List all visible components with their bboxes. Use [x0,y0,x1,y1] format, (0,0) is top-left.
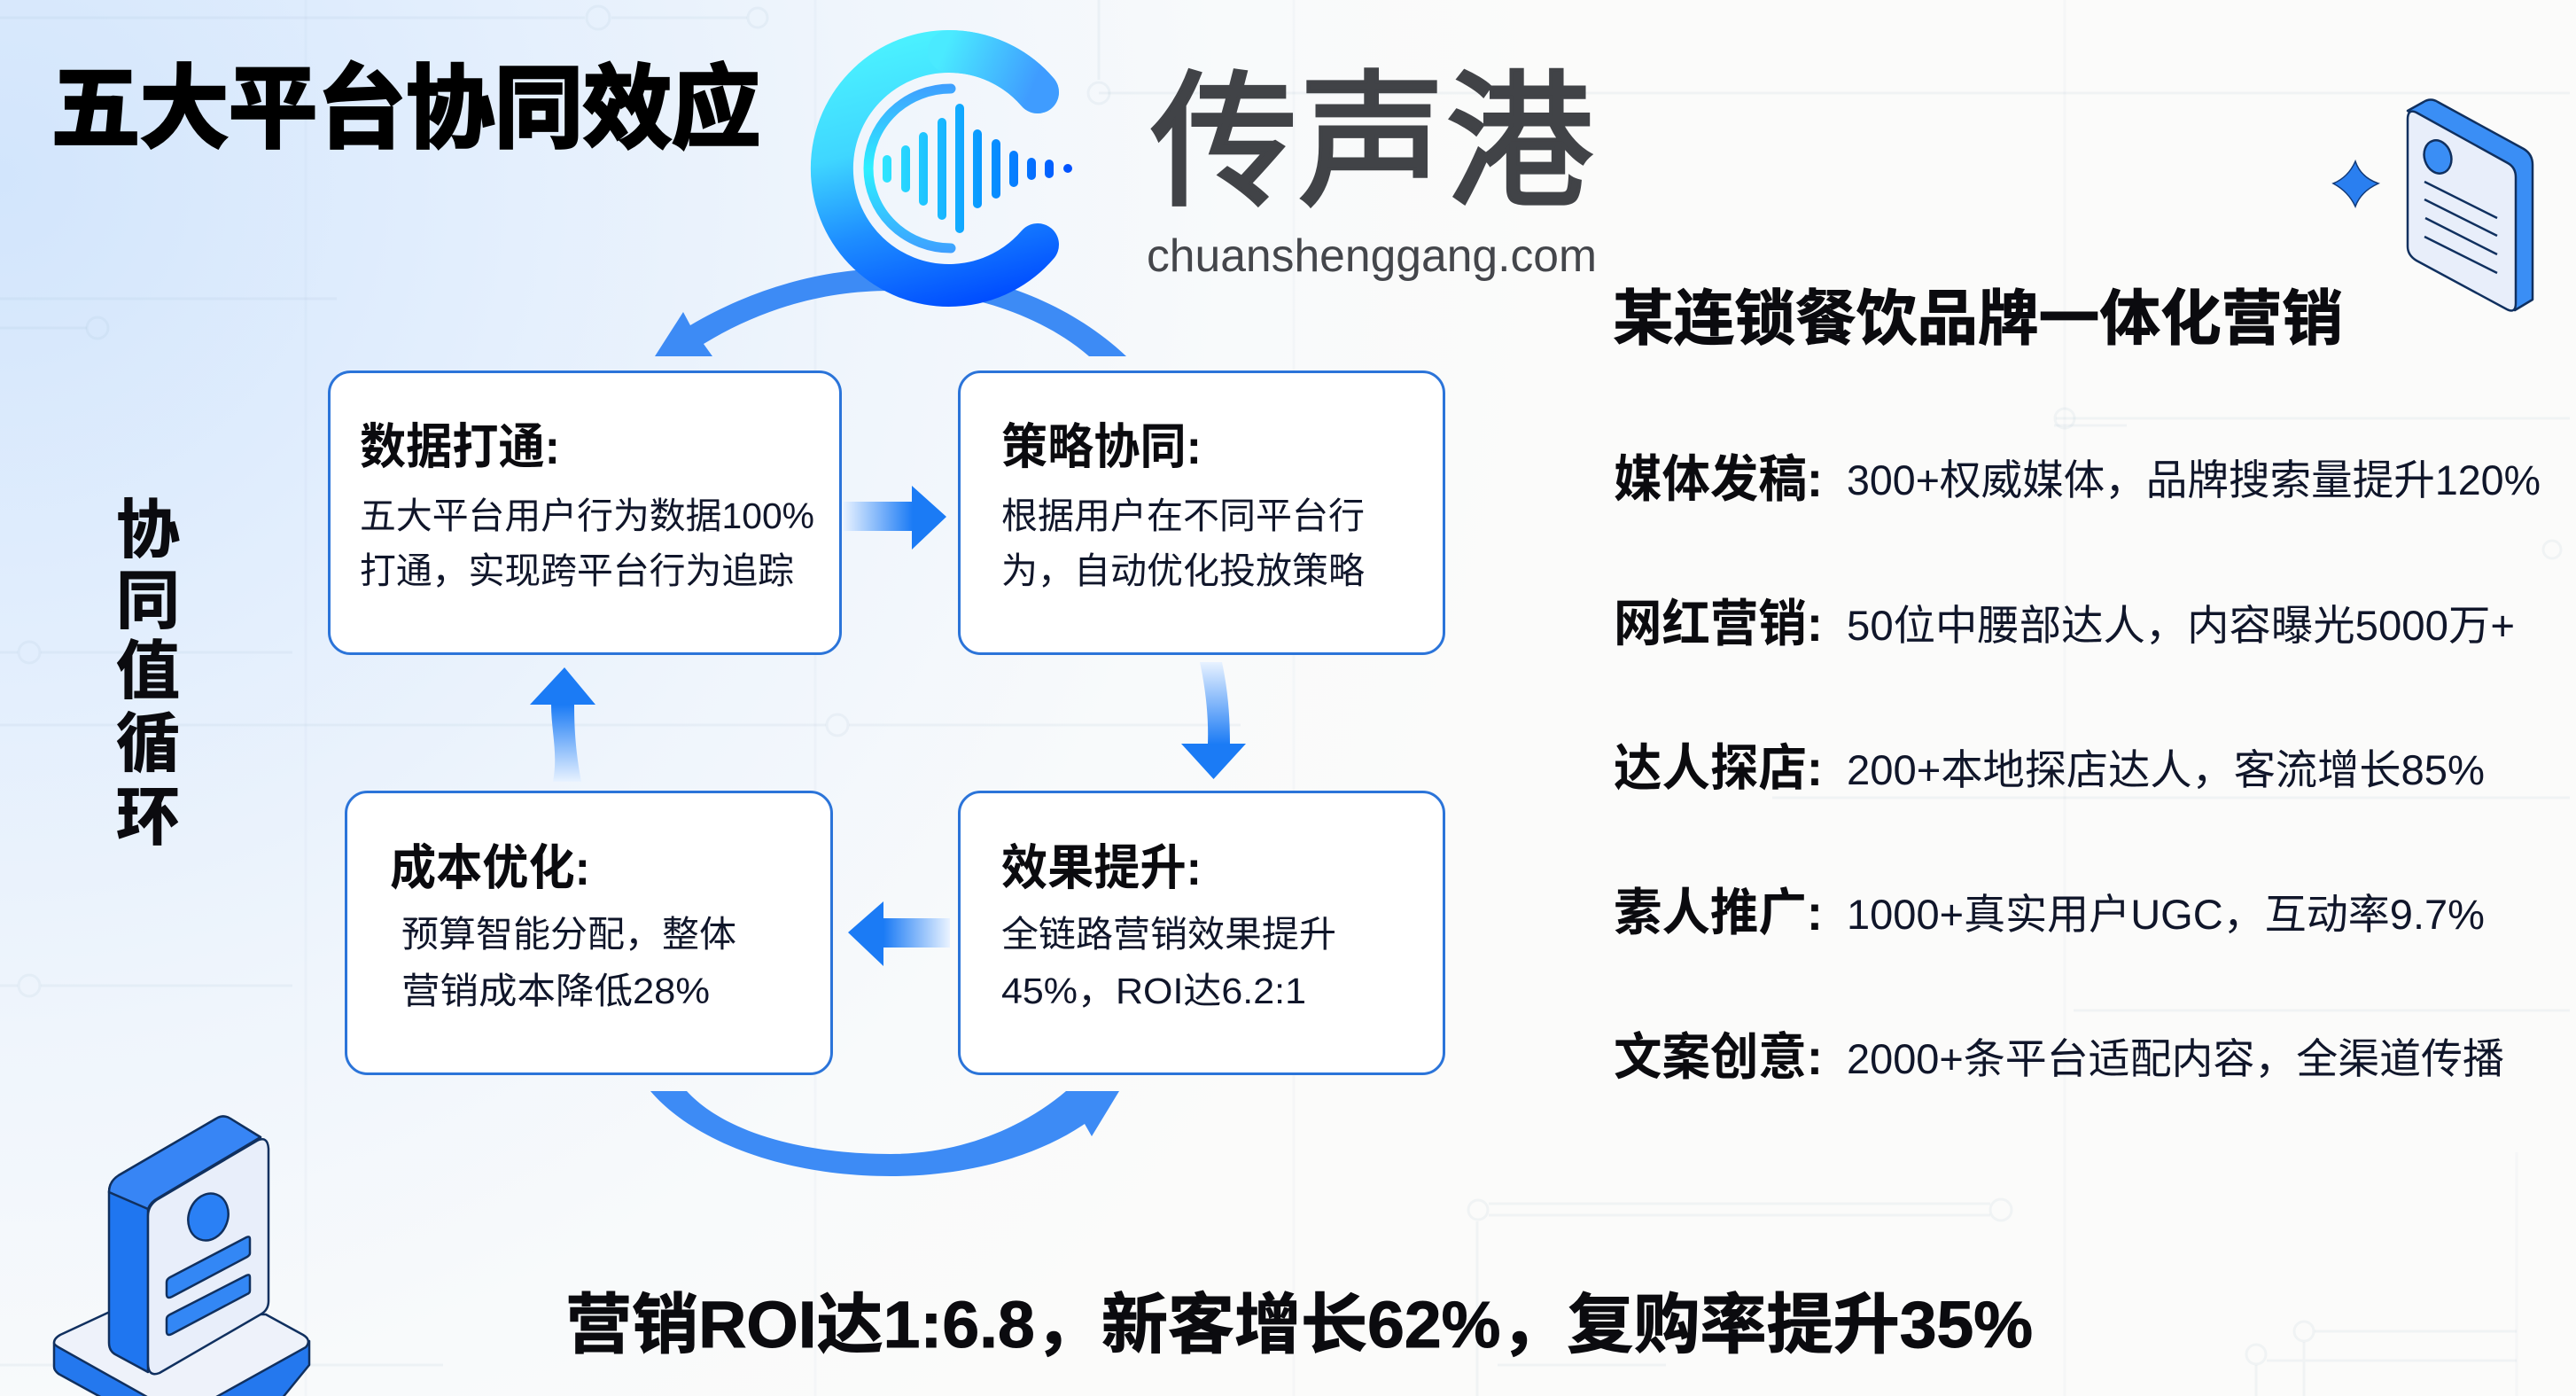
arrow: top curved arrow into data card [655,269,1126,356]
arrow: up [530,667,595,782]
list: media release [1614,451,2541,508]
list: ordinary user promotion: 1000+真实用户UGC，互动率9.7% [1847,891,2485,938]
card heading: 策略协同: [1001,419,1202,474]
card heading: 成本优化: [390,840,590,895]
list: influencer marketing: 网红营销: [1614,596,1823,652]
right panel heading: 某连锁餐饮品牌一体化营销 [1613,285,2343,353]
card heading: 效果提升: [1001,840,1202,895]
panel: data connection card [330,372,840,654]
card body [401,914,736,1011]
list: ordinary user promotion [1614,885,2485,941]
card body [1001,495,1365,591]
vertical label: 同 [116,566,180,637]
arrow: right [844,486,946,550]
logo wordmark: 传声港 [1150,61,1593,225]
list: ordinary user promotion: 素人推广: [1614,885,1823,941]
bottom results line: 营销ROI达1:6.8，新客增长62%，复购率提升35% [565,1288,2033,1361]
vertical label: 值 [116,636,180,707]
list: influencer marketing: 50位中腰部达人，内容曝光5000万+ [1847,602,2515,649]
logo icon [832,51,1072,285]
card body [1001,914,1336,1011]
vertical label: 循 [116,709,180,780]
arrow: down [1181,662,1246,779]
list: store visits: 200+本地探店达人，客流增长85% [1847,746,2485,793]
card body: 45%，ROI达6.2:1 [1001,971,1306,1011]
list: copy creative [1614,1029,2504,1086]
list: copy creative: 2000+条平台适配内容，全渠道传播 [1847,1035,2504,1082]
list: media release: 媒体发稿: [1614,451,1823,508]
icon: document [2408,99,2533,310]
vertical label: 协 [116,495,180,566]
vertical label: 环 [116,783,180,854]
panel: strategy card [959,372,1444,654]
arrow: bottom curved arrow into effect card [650,1091,1119,1176]
title: 五大平台协同效应 [51,58,760,160]
icon: profile card on base [54,1117,309,1396]
card body: 为，自动优化投放策略 [1001,550,1365,591]
list: copy creative: 文案创意: [1614,1029,1823,1086]
card body [360,495,814,591]
list: store visits: 达人探店: [1614,740,1823,797]
arrow: left [848,901,950,966]
list: store visits [1614,740,2485,797]
card body: 预算智能分配，整体 [401,914,736,955]
list: media release: 300+权威媒体，品牌搜索量提升120% [1847,456,2541,503]
panel: effect card [959,792,1444,1074]
icon: sparkle star [2333,161,2378,207]
card body: 打通，实现跨平台行为追踪 [360,550,794,591]
card body: 全链路营销效果提升 [1001,914,1336,955]
logo url: chuanshenggang.com [1147,230,1597,281]
card body: 根据用户在不同平台行 [1001,495,1365,536]
list: influencer marketing [1614,596,2515,652]
card body: 营销成本降低28% [401,971,710,1011]
panel: cost card [346,792,831,1074]
card body: 五大平台用户行为数据100% [360,495,814,536]
card heading: 数据打通: [360,419,560,474]
